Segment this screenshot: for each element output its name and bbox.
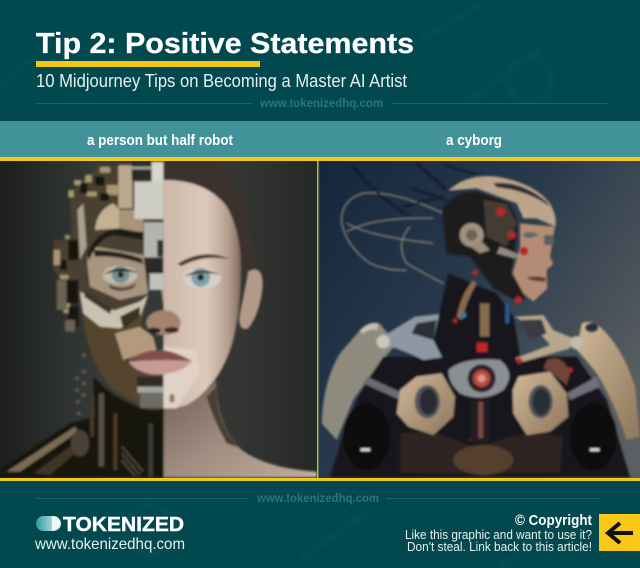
robot forehead and head [53,163,163,317]
subtitle: 10 Midjourney Tips on Becoming a Master AI Artist [36,71,407,91]
robot eye socket [87,247,148,300]
title: Tip 2: Positive Statements [36,28,414,60]
column label left: a person but half robot [87,133,233,149]
face [513,223,555,302]
ear disc [460,223,484,247]
shoulder armor left [322,322,397,440]
neck [433,273,520,360]
copyright note: Don't steal. Link back to this article! [407,539,592,554]
speckled mechanics [53,167,118,313]
helmet dark inner [442,192,528,303]
yellow frame lines [0,157,640,481]
title underline [36,61,260,67]
red details [469,207,573,442]
logo wordmark: TOKENIZED [63,513,184,536]
chest reactor [448,359,509,398]
wires [342,193,443,283]
logo [36,513,184,536]
robot jaw [83,300,163,409]
neck [163,380,317,477]
lips [127,350,193,361]
image: half human half robot portrait [0,160,318,478]
chest vent left [397,373,455,435]
copyright note [405,527,592,554]
copyright heading: © Copyright [515,513,592,529]
logo icon [36,516,61,531]
skin [163,180,241,409]
column label right: a cyborg [446,133,502,149]
eye [182,268,221,288]
collar [385,314,447,360]
hair [163,162,256,273]
brow [177,254,231,266]
copyright note: Like this graphic and want to use it? [405,527,592,542]
shoulder armor right [577,322,640,440]
robot neck [0,377,163,477]
column header band [0,121,640,157]
icon: left arrow [608,523,633,543]
chest vent right [513,372,568,435]
arm fragment [543,358,570,385]
helmet tan [448,176,556,227]
nose [157,260,163,307]
footer website divider: www.tokenizedhq.com [256,493,379,505]
header website divider: www.tokenizedhq.com [259,98,383,110]
back arrow button [599,514,640,551]
image: cyborg [320,160,640,478]
ear [239,269,263,329]
cheek plate [80,292,148,328]
chin mechanics [137,377,163,387]
dark torso [330,357,630,477]
footer website: www.tokenizedhq.com [34,536,185,553]
